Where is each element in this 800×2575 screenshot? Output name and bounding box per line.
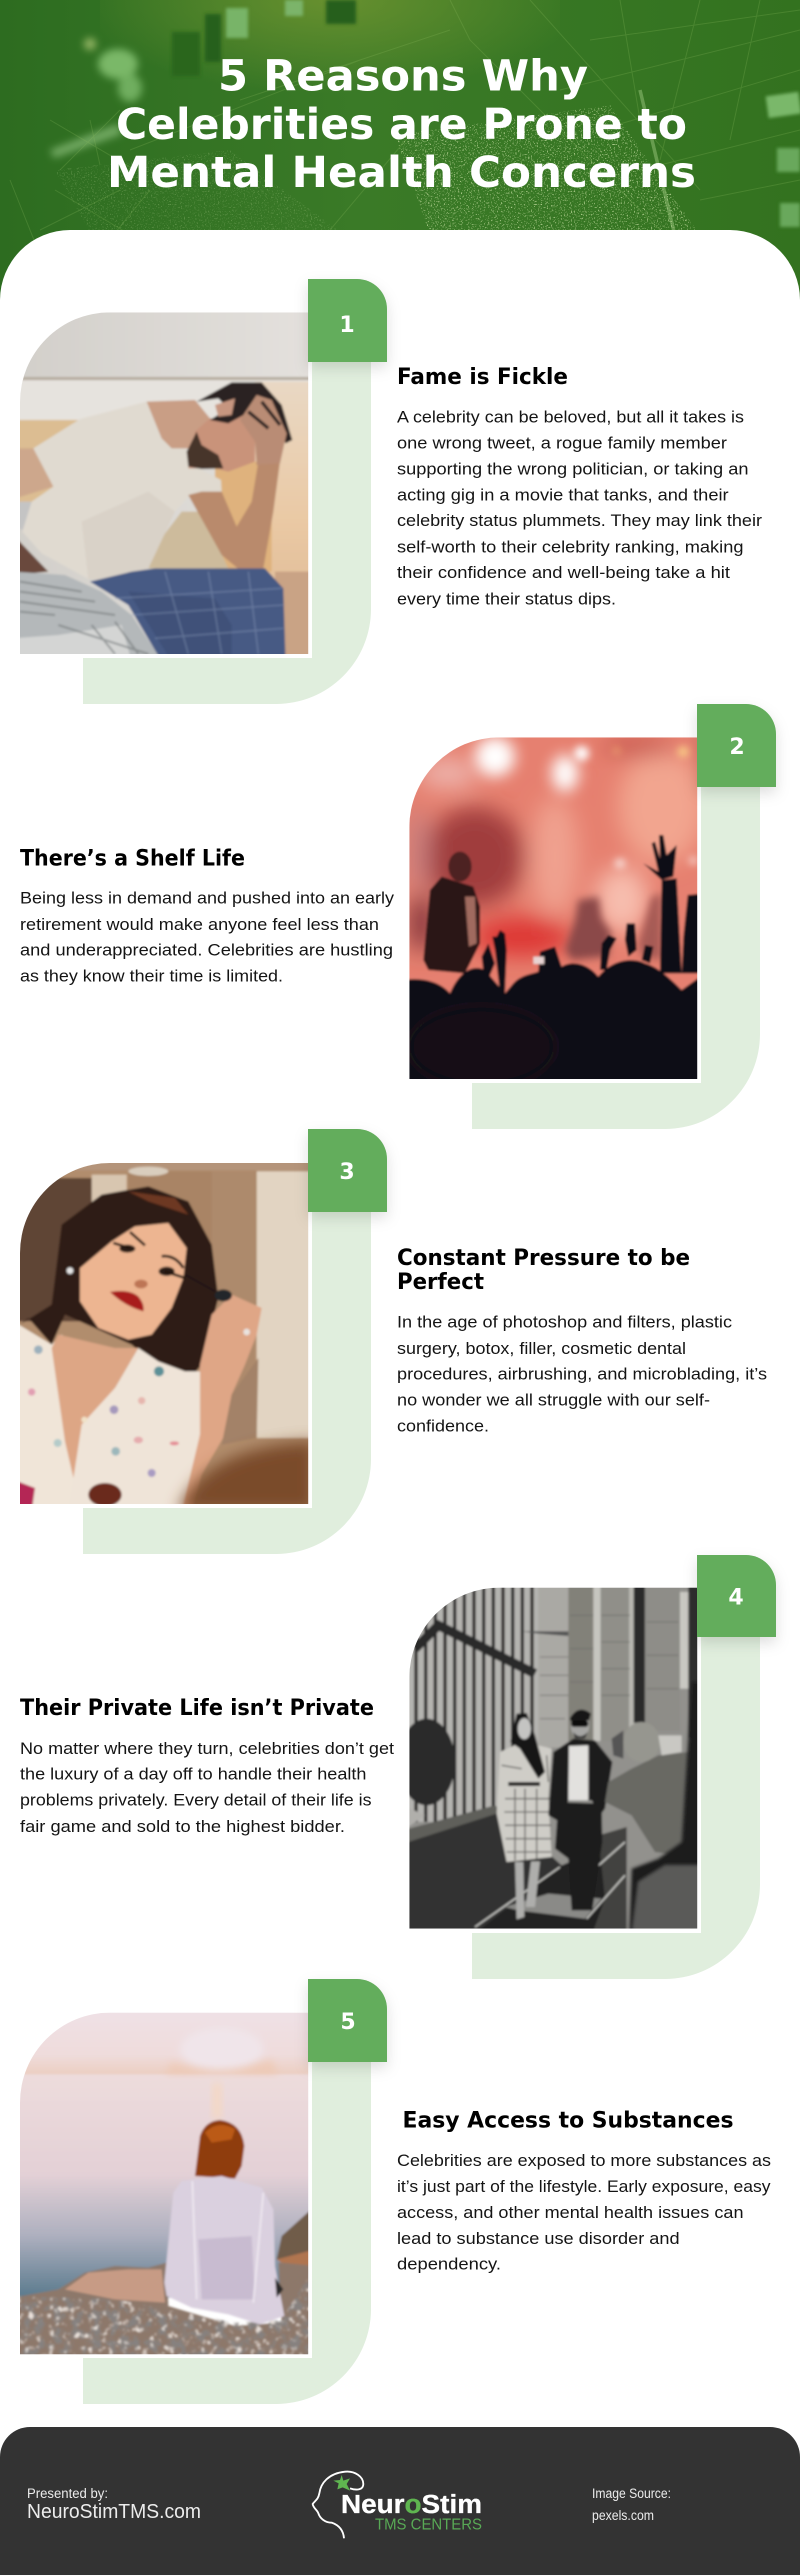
green accent frame 3 [83,1212,371,1554]
photo: man holding head [13,305,315,662]
green accent frame 4 [472,1637,760,1979]
text block: Easy Access to Substances: Easy Access to Substances [402,2108,734,2134]
text block: Their Private Life isn't Private: fair game and sold to the highest bidder. [20,1817,345,1836]
text block: There's a Shelf Life: Being less in demand and pushed into an early [20,888,395,908]
photo: couple photographed on street, black and white [398,1580,705,1935]
panel: reason 2 [20,704,776,1129]
text block: There's a Shelf Life: There’s a Shelf Life [20,846,245,872]
text block: Fame is Fickle: Fame is Fickle [397,364,568,390]
title [107,52,696,198]
badge 2: 2 [729,735,745,760]
text block: There's a Shelf Life: and underappreciated. Celebrities are hustling [20,941,393,960]
badge 3 [308,1129,387,1212]
footer: image source [592,2486,671,2523]
badge 5: 5 [340,2010,356,2035]
logo: NeuroStim TMS Centers: NeuroStim [341,2491,482,2519]
text block: Fame is Fickle: A celebrity can be beloved, but all it takes is [397,407,744,426]
text block: Fame is Fickle: one wrong tweet, a rogue family member [397,434,727,453]
text block: Fame is Fickle: self-worth to their celebrity ranking, making [397,537,744,556]
panel: reason 3 [13,1129,767,1554]
text block: Their Private Life isn't Private: the luxury of a day off to handle their health [20,1765,366,1784]
logo: NeuroStim TMS Centers [313,2472,482,2538]
photo: concert crowd [403,730,705,1087]
badge 1: 1 [339,313,355,338]
text block: Constant Pressure to be Perfect: procedures, airbrushing, and microblading, it’s [397,1365,767,1384]
text block: Easy Access to Substances: lead to substance use disorder and [397,2229,680,2248]
text block: Their Private Life isn't Private: No matter where they turn, celebrities don’t get [20,1739,394,1758]
panel: reason 4 [20,1555,776,1979]
text block: Fame is Fickle [397,364,762,608]
text block: There's a Shelf Life: as they know their time is limited. [20,966,283,985]
text block: Their Private Life isn't Private: Their Private Life isn’t Private [20,1695,374,1721]
footer: image source: pexels.com [592,2508,654,2523]
green accent frame 2 [472,787,760,1129]
text block: Fame is Fickle: every time their status dips. [397,589,616,608]
text block: Fame is Fickle: acting gig in a movie that tanks, and their [397,486,729,504]
footer: presented by [27,2486,201,2523]
logo: NeuroStim TMS Centers: TMS CENTERS [375,2516,482,2534]
icon: head outline with neuron [313,2472,363,2538]
footer: image source: Image Source: [592,2486,671,2501]
badge 5 [308,1979,387,2062]
text block: Easy Access to Substances: Celebrities are exposed to more substances as [397,2151,771,2170]
text block: Easy Access to Substances: dependency. [397,2254,501,2274]
text block: There's a Shelf Life: retirement would make anyone feel less than [20,915,379,934]
panel: reason 1 [13,279,762,704]
header background: green concert photo [0,0,800,340]
photo: woman applying mascara [13,1156,315,1511]
title: Mental Health Concerns [107,148,696,198]
text block: Constant Pressure to be Perfect: surgery, botox, filler, cosmetic dental [397,1339,686,1358]
text block: Constant Pressure to be Perfect: Perfect [397,1269,484,1295]
text block: Their Private Life isn't Private: problems privately. Every detail of their life is [20,1790,371,1810]
text block: There's a Shelf Life [20,846,395,985]
text block: Easy Access to Substances: it’s just part of the lifestyle. Early exposure, easy [397,2177,771,2196]
badge 1 [308,279,387,362]
footer [0,2427,800,2575]
panel: reason 5 [13,1979,771,2404]
footer: presented by: NeuroStimTMS.com [27,2500,201,2523]
green accent frame 1 [83,362,371,704]
text block: Easy Access to Substances [397,2108,771,2274]
footer: presented by: Presented by: [27,2486,108,2501]
text block: Fame is Fickle: their confidence and well-being take a hit [397,563,730,582]
badge 4: 4 [728,1586,744,1610]
photo: woman sitting on rock by the sea [13,2004,315,2359]
text block: Fame is Fickle: supporting the wrong politician, or taking an [397,459,748,478]
text block: Constant Pressure to be Perfect: confidence. [397,1417,489,1436]
badge 4 [697,1555,776,1637]
text block: Constant Pressure to be Perfect: no wonder we all struggle with our self- [397,1390,710,1409]
text block: Easy Access to Substances: access, and other mental health issues can [397,2203,744,2222]
title: Celebrities are Prone to [116,100,687,150]
text block: Constant Pressure to be Perfect: Constant Pressure to be [397,1245,690,1271]
text block: Fame is Fickle: celebrity status plummets. They may link their [397,511,762,530]
badge 2 [697,704,776,787]
text block: Their Private Life isn't Private [20,1695,394,1836]
green accent frame 5 [83,2062,371,2404]
text block: Constant Pressure to be Perfect [397,1245,767,1436]
title: 5 Reasons Why [218,52,588,102]
badge 3: 3 [339,1160,355,1185]
text block: Constant Pressure to be Perfect: In the age of photoshop and filters, plastic [397,1312,733,1332]
